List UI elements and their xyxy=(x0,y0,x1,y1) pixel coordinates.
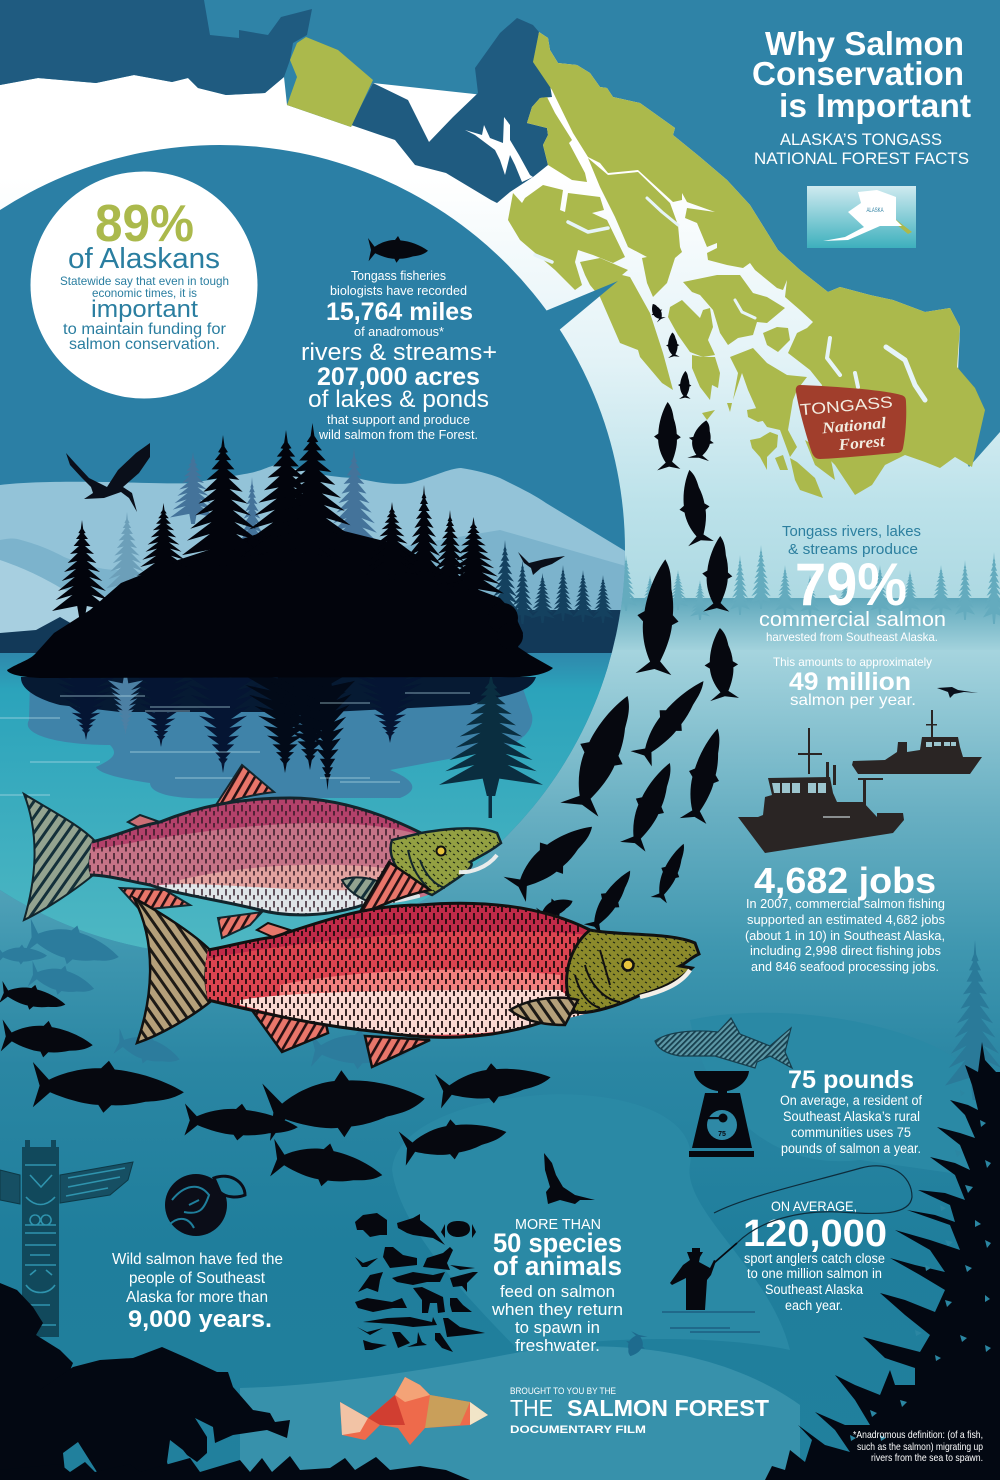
right distant treeline xyxy=(610,545,1000,650)
lower salmon school xyxy=(0,979,553,1194)
migrating salmon stream xyxy=(502,301,741,935)
front hill xyxy=(0,560,106,633)
body xyxy=(89,800,428,914)
text: 50 species of animals: freshwater. xyxy=(515,1337,600,1355)
upper right swoosh xyxy=(690,1013,1000,1180)
small central islands xyxy=(763,327,790,352)
89% circle callout: Statewide say that even in tough xyxy=(60,274,229,288)
text: 50 species of animals: 50 species xyxy=(493,1228,622,1258)
lighter island trees xyxy=(106,448,380,596)
icon: totem pole xyxy=(0,1140,133,1337)
lower light river swoosh xyxy=(240,1346,800,1480)
text: 79 percent commercial salmon: 79% xyxy=(795,551,907,618)
text: 4,682 jobs: (about 1 in 10) in Southeast Alaska, xyxy=(745,928,945,943)
tongass sign: TONGASS xyxy=(799,394,893,419)
text: 4,682 jobs xyxy=(745,860,945,974)
text: 79 percent commercial salmon: 49 million xyxy=(789,668,911,696)
text: 79 percent commercial salmon xyxy=(759,523,946,709)
text: 50 species of animals: when they return xyxy=(491,1301,623,1319)
glacier bay inlet xyxy=(465,117,533,182)
text: tongass fisheries: of anadromous* xyxy=(354,324,444,339)
text: 75 pounds: pounds of salmon a year. xyxy=(781,1141,921,1156)
eye xyxy=(622,960,634,970)
text: tongass fisheries: wild salmon from the Forest. xyxy=(318,428,478,442)
hills xyxy=(0,466,625,612)
circle scene xyxy=(0,448,640,962)
bear with salmon xyxy=(40,1347,290,1472)
dark territory top left xyxy=(0,0,312,95)
tongass sign: Forest xyxy=(837,433,886,454)
text: tongass fisheries: 15,764 miles xyxy=(326,298,473,326)
circle sky xyxy=(0,145,625,955)
text: 79 percent commercial salmon: Tongass rivers, lakes xyxy=(782,523,921,540)
left bush, grizzly bear and ground xyxy=(0,1283,470,1480)
text: wild salmon: Wild salmon have fed the xyxy=(112,1251,283,1268)
text: 75 pounds: communities uses 75 xyxy=(791,1125,911,1140)
film logo: polygon salmon xyxy=(340,1377,488,1445)
icon: front fishing boat xyxy=(738,728,904,853)
89% circle callout xyxy=(30,172,258,398)
text: 75 pounds: Southeast Alaska’s rural xyxy=(783,1109,920,1124)
tongass islands xyxy=(508,97,835,498)
tongass sign: National xyxy=(820,415,887,437)
far trees xyxy=(494,540,612,610)
text: 50 species of animals: to spawn in xyxy=(515,1319,600,1337)
text: wild salmon: Alaska for more than xyxy=(126,1289,268,1306)
lake xyxy=(0,652,640,962)
text: tongass fisheries xyxy=(301,269,497,442)
alaska inset map xyxy=(807,186,916,248)
central island xyxy=(683,275,785,345)
title: Why Salmon xyxy=(765,25,964,62)
panel: big circular lake scene xyxy=(0,145,640,962)
text: tongass fisheries: rivers & streams+ xyxy=(301,339,497,366)
film credit: SALMON FOREST xyxy=(567,1395,769,1421)
baranof chichagof block xyxy=(588,158,682,297)
film credit: BROUGHT TO YOU BY THE xyxy=(510,1386,616,1396)
bush xyxy=(0,1283,73,1470)
navy glacier bay land xyxy=(351,18,552,203)
text: 120,000 anglers: 120,000 xyxy=(743,1213,887,1255)
text: tongass fisheries: biologists have recorded xyxy=(330,284,467,298)
second hill layer xyxy=(0,530,624,610)
north island xyxy=(527,97,587,182)
lone tree on shore xyxy=(439,672,543,818)
title: Conservation xyxy=(752,55,964,92)
text: 4,682 jobs: 4,682 jobs xyxy=(754,860,936,901)
icon: fly fisherman xyxy=(662,1166,912,1332)
text: 75 pounds: 75 pounds xyxy=(788,1066,914,1094)
reflection trees xyxy=(70,678,408,773)
mouth xyxy=(640,970,690,997)
text: 4,682 jobs: and 846 seafood processing jobs. xyxy=(751,959,939,974)
89% circle callout: to maintain funding for xyxy=(63,321,227,338)
island reflection xyxy=(21,677,536,712)
map of Southeast Alaska xyxy=(0,0,985,498)
text: 50 species of animals: feed on salmon xyxy=(500,1283,615,1301)
fins xyxy=(357,862,430,917)
icon: haida orca circle xyxy=(165,1174,245,1236)
text: wild salmon xyxy=(112,1251,283,1333)
text: 50 species of animals xyxy=(491,1217,623,1355)
text: 79 percent commercial salmon: commercial salmon xyxy=(759,609,946,631)
89% circle callout: of Alaskans xyxy=(68,243,220,275)
subtitle xyxy=(754,130,969,168)
film credit: DOCUMENTARY FILM xyxy=(510,1424,646,1436)
illustrated salmon: red xyxy=(134,862,700,1067)
text: 120,000 anglers: to one million salmon in xyxy=(747,1266,882,1281)
text: 4,682 jobs: supported an estimated 4,682 jobs xyxy=(747,912,945,927)
subtitle: ALASKA’S TONGASS xyxy=(780,130,942,149)
text: 79 percent commercial salmon: This amounts to approximately xyxy=(773,655,932,669)
text: 75 pounds: On average, a resident of xyxy=(780,1093,922,1108)
title xyxy=(752,25,971,124)
long southern island xyxy=(580,258,673,390)
icon: eagle xyxy=(544,1153,595,1204)
head xyxy=(391,828,501,895)
89% circle callout: economic times, it is xyxy=(92,286,197,300)
tree gaps xyxy=(850,1090,991,1441)
icon: small bird right xyxy=(937,687,978,698)
text: 50 species of animals: of animals xyxy=(493,1251,622,1281)
text: 50 species of animals: MORE THAN xyxy=(515,1217,601,1233)
icon: fish on scale xyxy=(655,1018,792,1068)
icon: bird over trees xyxy=(518,552,565,575)
far navy shore xyxy=(518,610,620,653)
top sky band xyxy=(0,0,1000,467)
text: 79 percent commercial salmon: harvested from Southeast Alaska. xyxy=(766,630,938,644)
text: tongass fisheries: 207,000 acres xyxy=(317,363,480,391)
text: 4,682 jobs: including 2,998 direct fishing jobs xyxy=(750,943,941,958)
text: 75 pounds xyxy=(780,1066,922,1156)
lake ripple lines xyxy=(0,693,470,795)
small jumping fish xyxy=(622,1330,649,1360)
lake dark patch xyxy=(28,680,532,798)
text: tongass fisheries: that support and produce xyxy=(327,413,470,427)
icon: kitchen scale xyxy=(689,1071,754,1157)
map inlets xyxy=(535,198,925,400)
island silhouette xyxy=(7,423,553,678)
text: 79 percent commercial salmon: salmon per year. xyxy=(790,692,916,709)
text: 120,000 anglers: each year. xyxy=(785,1298,843,1313)
film credit: THE xyxy=(510,1395,553,1421)
icon: rear fishing boat xyxy=(852,710,982,774)
yakutat green section xyxy=(287,37,373,127)
mouth xyxy=(459,855,497,872)
illustrated salmon: pink xyxy=(24,765,510,938)
text: 120,000 anglers xyxy=(743,1198,887,1313)
pectoral fin xyxy=(342,877,380,905)
text: wild salmon: people of Southeast xyxy=(129,1270,266,1287)
fins xyxy=(214,765,274,808)
alaska inset map: ALASKA xyxy=(866,208,884,214)
ground and grass xyxy=(0,1456,470,1480)
right foreground tree and ground xyxy=(765,1042,1000,1480)
navy left shore xyxy=(0,617,70,653)
89% circle callout: salmon conservation. xyxy=(69,336,220,353)
icon group: animals that eat salmon xyxy=(355,1213,485,1352)
faint fish school xyxy=(0,916,410,1072)
subtitle: NATIONAL FOREST FACTS xyxy=(754,149,969,168)
icon: salmon silhouette xyxy=(368,236,428,263)
eye xyxy=(436,846,446,856)
tongass sign xyxy=(796,385,906,459)
text: 120,000 anglers: ON AVERAGE, xyxy=(771,1198,857,1214)
text: 120,000 anglers: Southeast Alaska xyxy=(765,1282,863,1297)
icon: kitchen scale: 75 xyxy=(718,1131,726,1138)
text: 120,000 anglers: sport anglers catch close xyxy=(744,1251,885,1266)
tongass mainland xyxy=(533,32,985,495)
middle river swoosh xyxy=(392,1094,790,1352)
tail xyxy=(24,794,96,920)
footnote xyxy=(853,1429,983,1464)
text: tongass fisheries: Tongass fisheries xyxy=(351,269,446,283)
text: 79 percent commercial salmon: & streams produce xyxy=(788,541,918,558)
title: is Important xyxy=(779,87,971,124)
callout wedge xyxy=(543,281,618,331)
text: wild salmon: 9,000 years. xyxy=(128,1306,272,1333)
tail xyxy=(134,898,210,1043)
pectoral fin xyxy=(510,998,578,1025)
faint far tree right xyxy=(945,940,1000,1100)
text: tongass fisheries: of lakes & ponds xyxy=(308,386,489,413)
89% circle callout: important xyxy=(91,296,198,323)
film credit xyxy=(510,1386,769,1436)
head xyxy=(567,930,699,1013)
icon: pelican xyxy=(66,443,150,512)
south large island xyxy=(730,348,807,457)
body xyxy=(205,904,588,1036)
large west island xyxy=(508,185,625,290)
text: 4,682 jobs: In 2007, commercial salmon fishing xyxy=(746,896,945,911)
89% circle callout: 89% xyxy=(95,195,194,253)
